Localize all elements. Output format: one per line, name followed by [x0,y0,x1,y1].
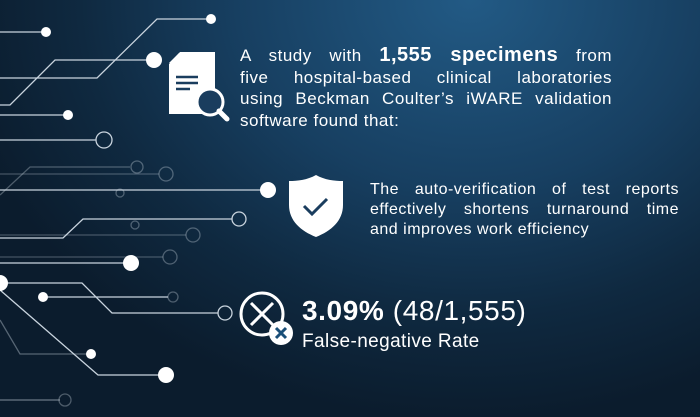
text: auto-verification [370,181,679,238]
text: auto-verification: and improves work efficiency [370,221,589,238]
text: study description: software found that: [240,110,399,130]
text: study description: A study with 1,555 specimens from [240,44,612,66]
text: study description [240,44,612,130]
text: study description: five hospital-based clinical laboratories [240,68,612,86]
stat: false-negative rate: False-negative Rate [302,331,480,352]
stat: false-negative rate: 3.09% (48/1,555) [302,295,526,326]
icon: shield with check [289,175,343,237]
text: study description: using Beckman Coulter’s iWARE validation [240,89,612,108]
stat: false-negative rate [302,295,526,352]
text: auto-verification: effectively shortens turnaround time [370,201,679,218]
icon: document with magnifier [169,52,230,122]
icon: x circle [240,292,293,345]
text: auto-verification: The auto-verification of test reports [370,181,679,198]
